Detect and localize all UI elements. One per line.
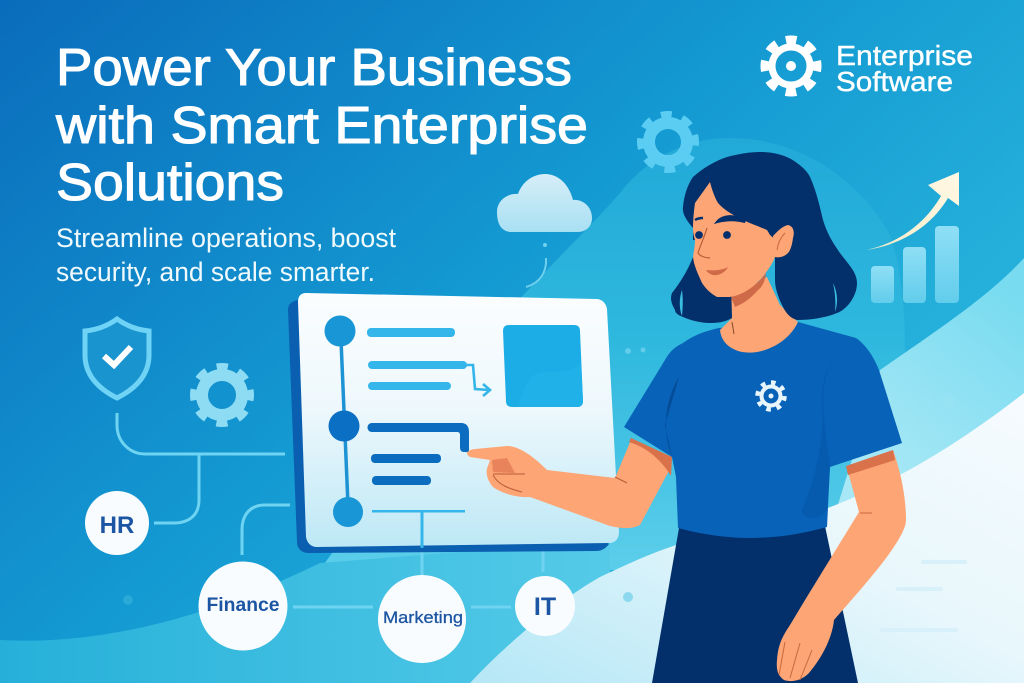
t-shirt — [624, 322, 902, 538]
board shadow — [288, 300, 609, 553]
person illustration — [467, 152, 906, 683]
shirt fold shadows — [665, 362, 832, 518]
node: HR — [85, 491, 149, 555]
decorative faint lines and dots — [123, 348, 967, 632]
icon: logo gear — [765, 40, 817, 92]
left sleeve trim — [629, 438, 672, 476]
icon: top gear — [635, 109, 701, 175]
logo wordmark — [836, 40, 973, 97]
bottom line — [372, 510, 465, 548]
hair — [683, 152, 857, 320]
subtitle: Streamline operations, boost — [56, 223, 396, 253]
ear — [773, 225, 794, 257]
chart bars — [871, 226, 959, 303]
panel: dashboard board — [288, 293, 619, 553]
neck line — [732, 322, 734, 334]
right arm — [777, 450, 906, 681]
node: Marketing — [378, 575, 466, 663]
timeline nodes — [324, 316, 363, 527]
right sleeve trim — [846, 450, 895, 475]
subtitle: security, and scale smarter. — [56, 257, 375, 287]
timeline stem — [341, 340, 348, 505]
title — [55, 39, 588, 212]
title: with Smart Enterprise — [55, 97, 588, 155]
face — [693, 182, 776, 297]
department nodes — [85, 491, 575, 663]
eyes — [695, 231, 703, 239]
icon: left gear — [194, 367, 250, 423]
light list rows — [367, 328, 467, 390]
node: Marketing: Marketing — [383, 608, 463, 627]
logo: Enterprise Software — [765, 40, 973, 97]
icon: security shield — [85, 319, 149, 398]
neck shadow — [731, 273, 766, 307]
logo wordmark: Enterprise — [836, 40, 973, 71]
board face — [298, 293, 619, 547]
node: IT — [515, 576, 575, 636]
icon: growth chart — [866, 172, 959, 303]
title: Power Your Business — [56, 39, 572, 97]
node: Finance — [198, 562, 288, 650]
elbow arrow — [462, 365, 490, 396]
dark list rows — [368, 423, 469, 485]
nose — [698, 228, 710, 258]
image card — [503, 325, 583, 407]
hair highlights — [680, 283, 837, 316]
node: HR: HR — [100, 512, 134, 539]
mouth — [706, 267, 728, 275]
node: IT: IT — [534, 593, 556, 621]
pants — [652, 526, 858, 683]
logo wordmark: Software — [836, 66, 953, 97]
neck — [720, 277, 798, 353]
title: Solutions — [56, 154, 284, 212]
subtitle — [56, 223, 396, 287]
growth arrow — [866, 172, 959, 250]
eyebrows — [695, 216, 745, 222]
node: Finance: Finance — [206, 595, 280, 616]
connector lines — [117, 413, 543, 607]
icon: shirt gear — [758, 382, 784, 410]
left arm — [467, 440, 672, 528]
icon: cloud — [497, 174, 592, 287]
